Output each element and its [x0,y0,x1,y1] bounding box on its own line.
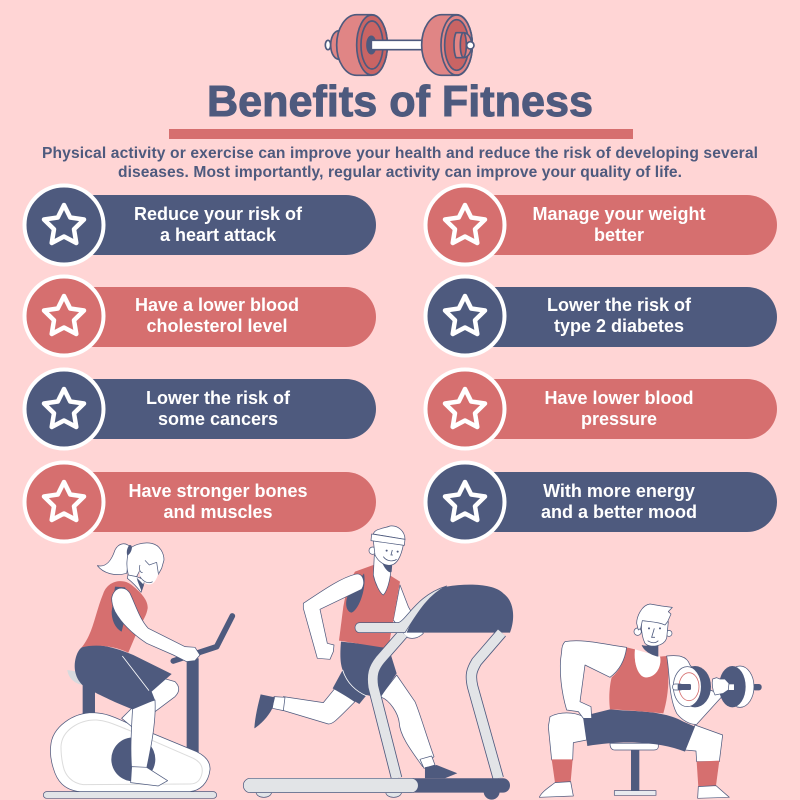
title: Benefits of Fitness [207,77,593,126]
benefit: cancers: some cancers [158,409,278,429]
intro text: Physical activity or exercise can improve your health and reduce the risk of developing several [42,145,758,162]
dumbbell held by lifter [673,666,762,707]
woman's head [97,543,164,592]
benefit: energy and mood: With more energy [543,481,695,501]
benefit: cancers [24,370,376,448]
benefit: diabetes: type 2 diabetes [554,316,684,336]
benefit: weight [426,186,777,264]
benefit: cancers: Lower the risk of [146,388,291,408]
benefit: bones and muscles: Have stronger bones [128,481,308,501]
benefit: heart attack [24,186,376,264]
benefit: blood pressure [426,370,777,448]
intro text: diseases. Most importantly, regular activity can improve your quality of life. [118,164,682,181]
benefit: bones and muscles: and muscles [163,502,273,522]
icon: dumbbell [325,15,474,75]
benefit: cholesterol: cholesterol level [146,316,288,336]
benefit: cholesterol [24,276,376,356]
runner's head [369,526,405,595]
illustration: man running on treadmill [243,526,513,800]
illustration: woman on exercise bike [43,543,232,798]
benefit: energy and mood [426,462,777,542]
benefit: energy and mood: and a better mood [541,502,697,522]
benefit: diabetes: Lower the risk of [547,295,692,315]
lifter's head [634,604,672,657]
illustration: man lifting dumbbell on bench [539,604,762,798]
benefit: weight: Manage your weight [532,204,706,224]
benefit: heart attack: a heart attack [160,225,277,245]
benefit: blood pressure: Have lower blood [544,388,694,408]
title divider bar [169,129,633,139]
benefit: diabetes [426,276,777,356]
benefit: blood pressure: pressure [581,409,657,429]
benefit: heart attack: Reduce your risk of [134,204,303,224]
intro text [42,145,758,181]
benefit: bones and muscles [24,462,376,542]
benefit: weight: better [594,225,644,245]
benefit: cholesterol: Have a lower blood [135,295,299,315]
